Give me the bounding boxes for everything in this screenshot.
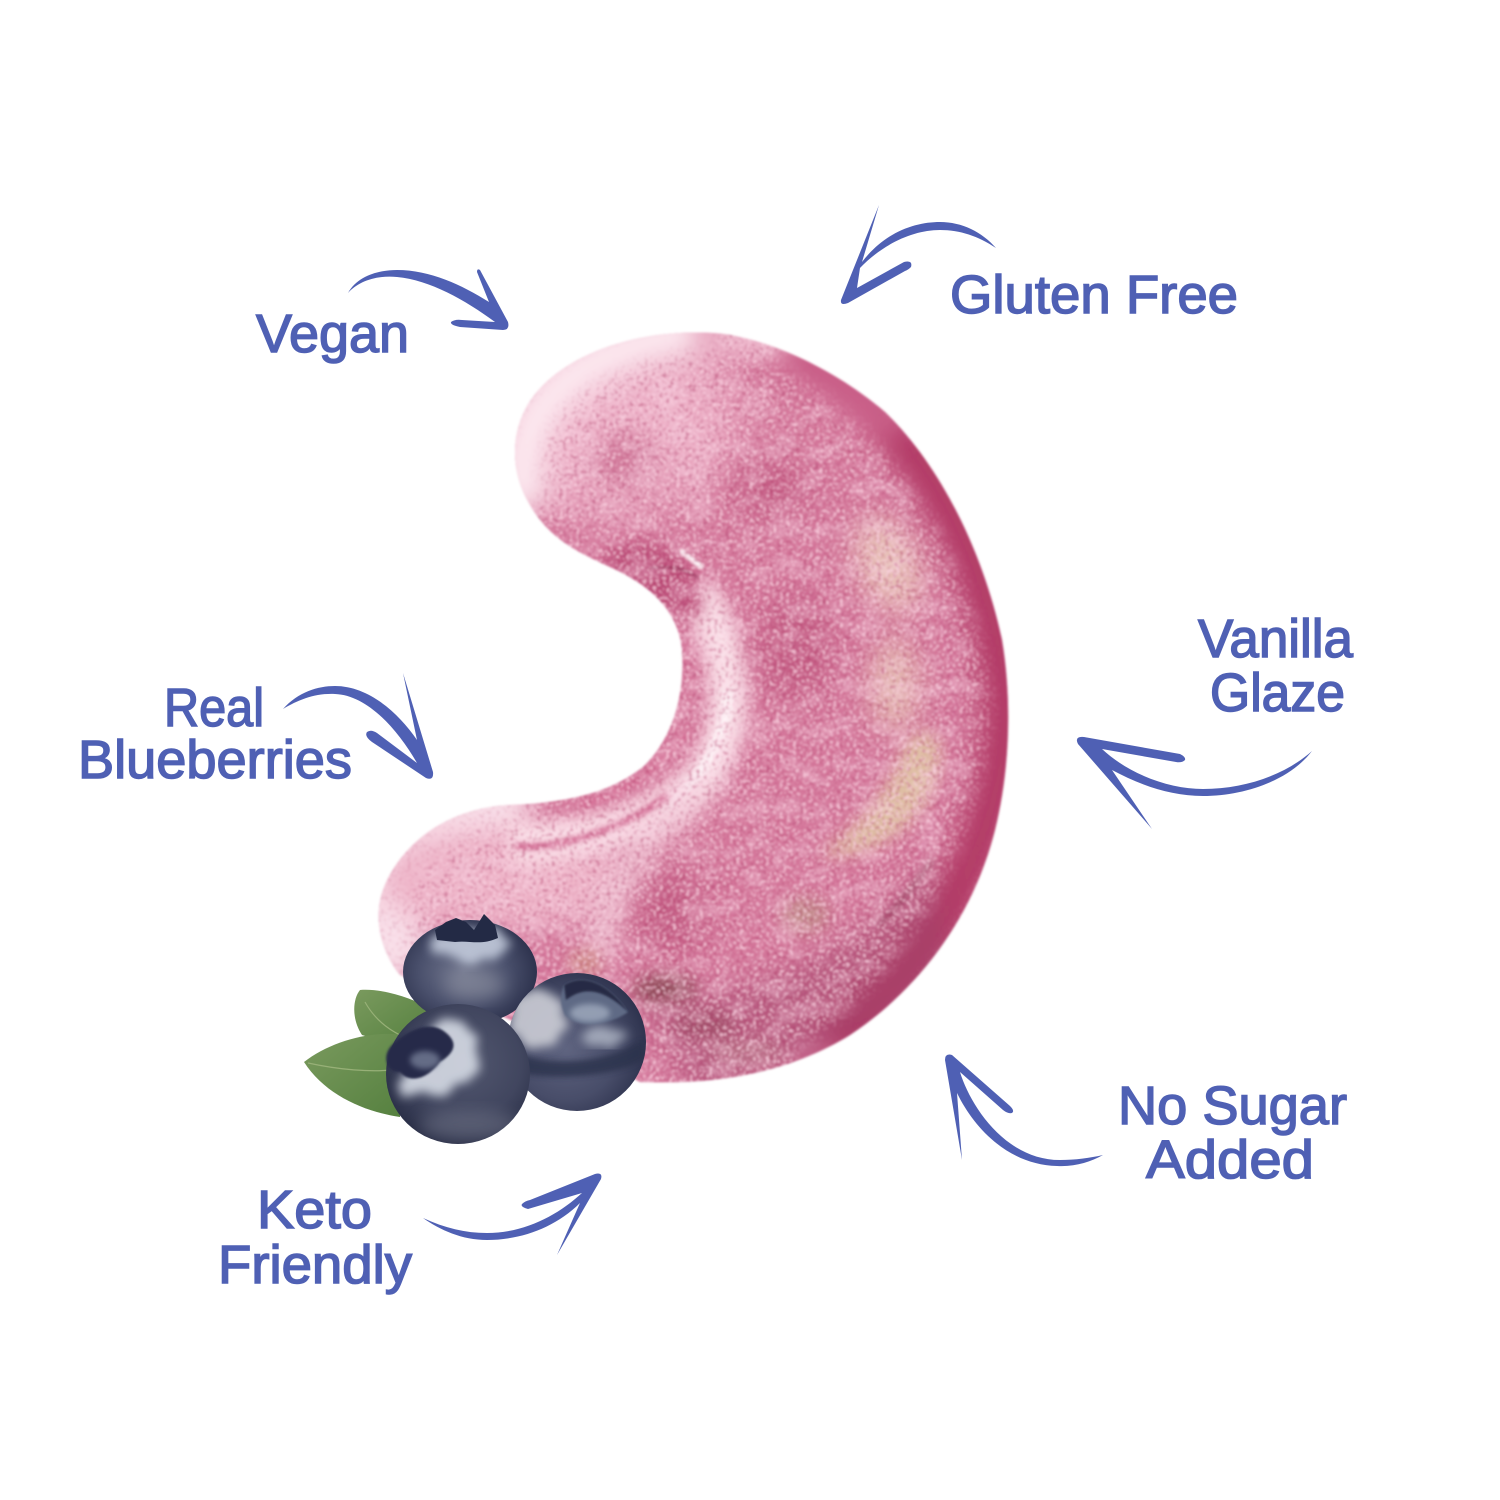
dimple	[386, 1027, 454, 1079]
pale tail glow	[391, 808, 530, 975]
label: Real Blueberries: Real	[164, 678, 264, 738]
arrow: Gluten Free	[841, 205, 996, 304]
arrow: No Sugar Added	[945, 1055, 1103, 1166]
leaves	[304, 990, 430, 1117]
label: Keto Friendly: Friendly	[218, 1235, 412, 1295]
arrow: Vegan	[348, 269, 508, 330]
inner pale band	[510, 590, 728, 845]
label: No Sugar Added: No Sugar	[1118, 1076, 1347, 1136]
tail pink wash	[380, 830, 620, 930]
label: No Sugar Added	[1118, 1076, 1347, 1190]
leaf: upper	[354, 990, 430, 1045]
pale head wash	[480, 325, 740, 515]
lower muddy patches	[569, 897, 829, 1063]
glaze patches	[841, 507, 935, 733]
outer dark rim	[830, 420, 1006, 1045]
calyx	[435, 914, 498, 942]
arrow: Keto Friendly	[423, 1174, 601, 1255]
label: Vegan: Vegan	[256, 304, 409, 364]
blueberry: top	[403, 914, 537, 1024]
cashew	[360, 320, 1020, 1100]
dimple	[561, 980, 628, 1024]
leaf: lower	[304, 1034, 405, 1117]
label: Vanilla Glaze: Vanilla	[1198, 609, 1354, 669]
upper rim transition	[780, 345, 900, 430]
label: Keto Friendly: Keto	[257, 1180, 372, 1240]
bottom muted plum area	[646, 876, 944, 1082]
label: Real Blueberries: Blueberries	[78, 730, 352, 790]
label: Keto Friendly	[218, 1180, 412, 1295]
arrow: Vanilla Glaze	[1077, 737, 1312, 829]
inner crease lines	[582, 766, 658, 808]
sugar speckle texture	[379, 334, 997, 1083]
label: Vanilla Glaze	[1198, 609, 1354, 723]
pale head glow	[522, 332, 700, 510]
pale top fade	[695, 324, 795, 356]
inner white streak	[685, 692, 732, 788]
label: Gluten Free: Gluten Free	[950, 265, 1238, 325]
blueberry: front	[386, 1004, 530, 1144]
blueberry: right	[508, 973, 646, 1111]
crease under head	[600, 542, 705, 615]
label: Vanilla Glaze: Glaze	[1210, 663, 1345, 723]
lower glaze crescent	[820, 732, 940, 856]
diagonal pale streak	[595, 790, 700, 960]
label: Real Blueberries	[78, 678, 352, 790]
label: No Sugar Added: Added	[1146, 1130, 1314, 1190]
dark textured center patches	[593, 438, 835, 960]
arrow: Real Blueberries	[283, 673, 433, 779]
